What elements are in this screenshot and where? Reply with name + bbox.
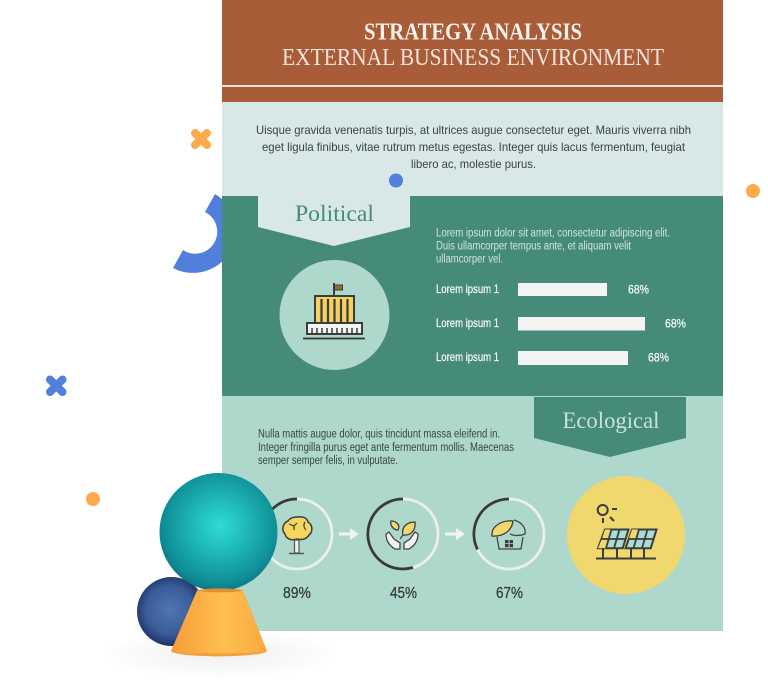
shape: orange dot right [746, 184, 760, 198]
intro text [256, 123, 691, 171]
ecological description: Integer fringilla purus eget ante fermentum mollis. Maecenas [258, 442, 514, 454]
intro text: libero ac, molestie purus. [411, 157, 536, 171]
progress ring: leaves 45% [368, 499, 438, 602]
shape: orange dot left [86, 492, 100, 506]
bar chart: 68% [648, 350, 669, 364]
icon: solar panels [567, 476, 685, 594]
political heading tab [258, 195, 410, 246]
progress ring: house 67% [474, 499, 544, 602]
subtitle: EXTERNAL BUSINESS ENVIRONMENT [282, 45, 664, 71]
ecological description: semper semper felis, in vulputate. [258, 455, 398, 467]
panel: political [222, 195, 723, 396]
progress ring: house 67%: 67% [496, 585, 523, 602]
bar chart: 68% [628, 282, 649, 296]
shape: blue cross [50, 380, 62, 392]
3D shapes illustration [137, 473, 278, 656]
decorative blue arc [173, 194, 222, 273]
political description: ullamcorper vel. [436, 254, 503, 266]
ecological heading tab: Ecological [562, 408, 660, 433]
ecological description [258, 428, 514, 467]
bar chart: Lorem ipsum 1 [436, 350, 499, 364]
ground shadow [106, 630, 334, 678]
panel: ecological [222, 396, 723, 631]
bar chart: Lorem ipsum 1 [436, 282, 499, 296]
political heading tab: Political [295, 201, 374, 226]
shape: orange cross [195, 133, 207, 145]
panel: header [222, 0, 723, 102]
arrow [339, 528, 359, 540]
teal sphere [160, 473, 278, 591]
intro text: eget ligula finibus, vitae rutrum metus egestas. Integer quis lacus fermentum, feugiat [262, 140, 686, 154]
ecological heading tab [534, 397, 686, 457]
progress ring: leaves 45%: 45% [390, 585, 417, 602]
progress ring: tree 89% [262, 499, 332, 602]
navy sphere [137, 577, 206, 646]
ecological description: Nulla mattis augue dolor, quis tincidunt massa eleifend in. [258, 428, 500, 440]
political description: Duis ullamcorper tempus ante, et aliquam velit [436, 240, 632, 252]
arrow [445, 528, 465, 540]
political description: Lorem ipsum dolor sit amet, consectetur adipiscing elit. [436, 228, 670, 240]
intro text: Uisque gravida venenatis turpis, at ultrices augue consectetur eget. Mauris viverra nibh [256, 123, 691, 137]
orange cone [171, 589, 267, 656]
icon: government building [280, 260, 390, 370]
bar chart: Lorem ipsum 1 [436, 316, 499, 330]
bar chart [436, 282, 686, 365]
panel: introduction [222, 102, 723, 196]
political description [436, 228, 670, 266]
shape: blue dot [389, 174, 403, 188]
progress ring: tree 89%: 89% [283, 585, 311, 602]
bar chart: 68% [665, 316, 686, 330]
title: STRATEGY ANALYSIS [364, 20, 582, 46]
